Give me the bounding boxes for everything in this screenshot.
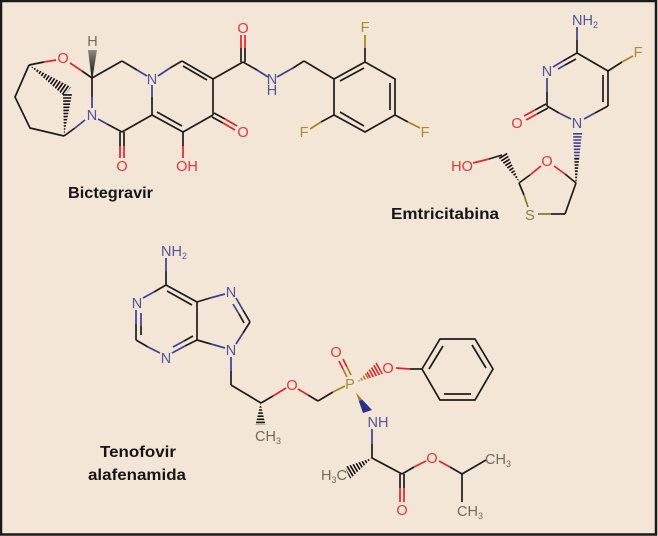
molecule: Tenofovir alafenamida: 3 — [506, 459, 511, 469]
molecule: Bictegravir — [15, 20, 430, 175]
molecule: Tenofovir alafenamida — [132, 244, 511, 521]
molecule: Tenofovir alafenamida: N — [226, 285, 236, 301]
molecule: Bictegravir: N — [267, 72, 277, 88]
molecule: Tenofovir alafenamida: CH — [457, 504, 478, 520]
label: Tenofovir alafenamida: alafenamida — [88, 467, 186, 484]
label: Tenofovir alafenamida: Tenofovir — [100, 444, 176, 461]
molecule: Tenofovir alafenamida: P — [345, 377, 355, 393]
molecule: Emtricitabina: S — [525, 208, 535, 224]
molecule: Emtricitabina: 2 — [593, 20, 598, 30]
molecule: Emtricitabina — [451, 13, 643, 224]
molecule: Tenofovir alafenamida: N — [161, 351, 171, 367]
molecule: Tenofovir alafenamida: 3 — [276, 436, 281, 446]
molecule: Tenofovir alafenamida: 2 — [182, 251, 187, 261]
molecule: Emtricitabina: O — [541, 154, 553, 170]
molecule: Emtricitabina: N — [542, 64, 552, 80]
molecule: Bictegravir: N — [87, 108, 97, 124]
molecule: Emtricitabina: O — [511, 116, 523, 132]
molecule: Emtricitabina: N — [572, 116, 582, 132]
molecule: Bictegravir: O — [237, 21, 249, 37]
molecule: Tenofovir alafenamida: 3 — [331, 475, 337, 485]
label: Bictegravir: Bictegravir — [68, 185, 153, 202]
molecule: Bictegravir: O — [116, 159, 128, 175]
molecule: Bictegravir: F — [361, 20, 370, 36]
molecule: Tenofovir alafenamida: CH — [255, 429, 276, 445]
molecule: Tenofovir alafenamida: O — [382, 361, 394, 377]
molecule: Tenofovir alafenamida: N — [226, 343, 236, 359]
molecule: Tenofovir alafenamida: N — [132, 296, 142, 312]
molecule: Tenofovir alafenamida: O — [426, 451, 438, 467]
molecule: Tenofovir alafenamida: NH — [161, 244, 182, 260]
molecule: Bictegravir: O — [237, 125, 249, 141]
molecule: Emtricitabina: F — [634, 45, 643, 61]
molecule: Emtricitabina: NH — [572, 13, 593, 29]
molecule: Bictegravir: F — [300, 125, 309, 141]
molecule: Tenofovir alafenamida: O — [330, 345, 342, 361]
molecule: Bictegravir: H — [87, 34, 98, 50]
molecule: Bictegravir: N — [147, 72, 157, 88]
molecule: Tenofovir alafenamida: H — [321, 468, 331, 484]
molecule: Tenofovir alafenamida: CH — [485, 452, 506, 468]
molecule: Tenofovir alafenamida: C — [337, 468, 347, 484]
molecule: Bictegravir: OH — [176, 159, 198, 175]
molecule: Bictegravir: O — [57, 51, 69, 67]
molecule: Bictegravir: F — [421, 125, 430, 141]
molecule: Tenofovir alafenamida: O — [286, 378, 298, 394]
molecule: Emtricitabina: HO — [451, 159, 473, 175]
molecule: Tenofovir alafenamida: NH — [368, 415, 388, 431]
molecule: Tenofovir alafenamida: O — [396, 503, 408, 519]
molecule: Bictegravir: H — [267, 83, 277, 99]
molecule: Tenofovir alafenamida: 3 — [478, 511, 483, 521]
label: Tenofovir alafenamida — [88, 444, 186, 484]
label: Emtricitabina: Emtricitabina — [391, 206, 499, 223]
